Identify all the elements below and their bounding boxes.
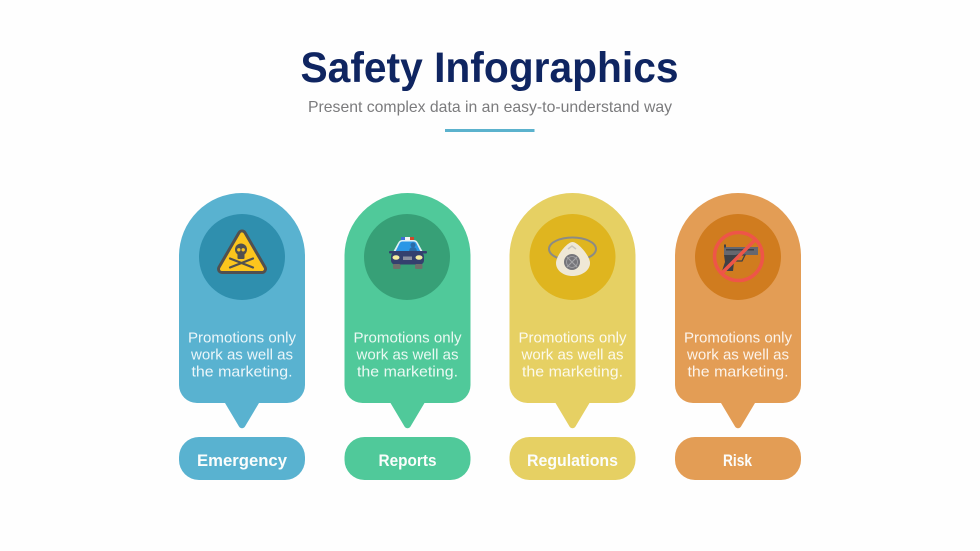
title: Safety Infographics — [300, 44, 678, 92]
body text: emergency: the marketing. — [192, 364, 292, 380]
body text: risk: the marketing. — [688, 364, 788, 380]
body text: reports: work as well as — [355, 346, 458, 364]
body text: emergency: work as well as — [190, 346, 293, 364]
icon circle: risk — [695, 214, 781, 300]
body text: regulations — [518, 330, 627, 380]
label: risk — [675, 437, 801, 480]
icon: police car — [389, 237, 427, 269]
body text: regulations: work as well as — [520, 346, 624, 364]
pin shape: reports — [344, 193, 470, 428]
icon: respirator mask — [549, 238, 596, 276]
icon circle: reports — [364, 214, 450, 300]
panel: regulations — [510, 193, 636, 480]
body text: reports: Promotions only — [354, 330, 462, 346]
body text: reports: the marketing. — [357, 364, 458, 380]
panel: emergency — [179, 193, 305, 480]
pin shape: risk — [675, 193, 801, 428]
body text: risk: work as well as — [686, 346, 789, 364]
body text: regulations: Promotions only — [518, 330, 627, 346]
label: regulations: Regulations — [527, 451, 618, 470]
icon circle: emergency — [199, 214, 285, 300]
label: emergency: Emergency — [197, 451, 288, 470]
body text: risk: Promotions only — [684, 330, 792, 346]
icon circle: regulations — [530, 214, 616, 300]
body text: emergency: Promotions only — [188, 330, 296, 346]
label: risk: Risk — [723, 451, 752, 470]
panel: reports — [344, 193, 470, 480]
pin shape: emergency — [179, 193, 305, 428]
icon: skull warning triangle — [222, 234, 262, 269]
body text: emergency — [188, 330, 296, 380]
subtitle: Present complex data in an easy-to-understand way — [308, 99, 672, 116]
accent underline — [445, 129, 534, 132]
body text: regulations: the marketing. — [522, 364, 623, 380]
body text: reports — [354, 330, 462, 380]
panel: risk — [675, 193, 801, 480]
pin shape: regulations — [510, 193, 636, 428]
body text: risk — [684, 330, 792, 380]
label: reports — [344, 437, 470, 480]
label: reports: Reports — [378, 451, 436, 470]
icon: crossed-out gun — [714, 232, 762, 280]
label: emergency — [179, 437, 305, 480]
label: regulations — [510, 437, 636, 480]
